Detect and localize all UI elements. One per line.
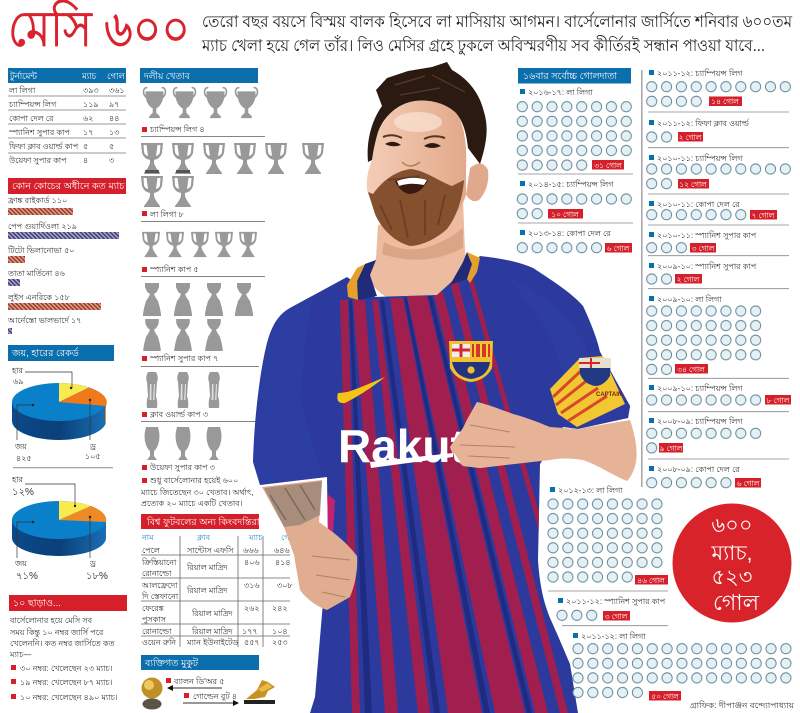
hair: [368, 62, 487, 164]
pie chart: counts: ৪২৫: [16, 454, 32, 463]
panel: team titles: লা লিগা ৮: [149, 210, 185, 219]
panel: other football legends table: বিশ্ব ফুটবলের অন্য কিংবদন্তিরা: [146, 515, 261, 528]
graphic credit: গ্রাফিক: দীপাঞ্জন বন্দ্যোপাধ্যায়: [690, 700, 794, 710]
panel: other football legends table: ওয়েন রুনি: [142, 638, 176, 647]
panel: tournament table: ৪: [83, 156, 88, 165]
panel: besides number 10: খেলেননি। কত নম্বর জার্সিতে কত: [10, 639, 116, 648]
season: 2011-12 champions league: ২০১১-১২: চ্যাম্পিয়ন্স লিগ: [657, 69, 743, 78]
panel: tournament table: ১১৯: [83, 100, 99, 109]
panel: matches under coaches: ফ্রাঙ্ক রাইকার্ড ১১০: [7, 196, 67, 205]
season: 2010-11 spanish super cup: ২০১০-১১: স্প্যানিশ সুপার কাপ: [657, 231, 757, 240]
panel: matches under coaches: [7, 178, 126, 334]
panel: personal awards: ব্যালন ডি'অর ৫: [173, 677, 224, 686]
panel: besides number 10: ১০ ছাড়াও...: [13, 598, 61, 609]
icons: spanish super cup trophies: [143, 283, 253, 351]
panel: tournament table: ৯৭: [109, 100, 119, 109]
panel: matches under coaches: পেপ গুয়ার্দিওলা ২১৯: [8, 222, 77, 231]
season: 2012-13 la liga: ৪৬ গোল: [637, 576, 666, 585]
icons: spanish cup trophies: [142, 232, 257, 257]
season: 2011-12 spanish super cup: ২০১১-১২: স্প্যানিশ সুপার কাপ: [566, 597, 666, 606]
panel: other football legends table: ২৬২: [244, 604, 260, 613]
icons: la liga trophies: [141, 143, 324, 207]
season: 2010-11 copa del rey: ২০১০-১১: কোপা দেল রে: [657, 200, 740, 209]
panel: other football legends table: [141, 514, 299, 647]
season: 2012-13 la liga: ২০১২-১৩: লা লিগা: [558, 486, 623, 495]
text: trophies note: ম্যাচে জিতেছেন ৩০ খেতাব। অর্থাৎ,: [140, 488, 253, 497]
pie chart: counts: ৬৯: [13, 377, 23, 386]
panel: tournament table: ৬২: [83, 114, 93, 123]
panel: other football legends table: ১৭৭: [242, 627, 258, 636]
intro text: [201, 11, 793, 55]
panel: team titles: [140, 68, 324, 508]
season: 2014-15 champions league: ২০১৪-১৫: চ্যাম্পিয়ন্স লিগ: [528, 180, 614, 189]
panel: other football legends table: রিয়াল মাদ্রিদ: [186, 586, 228, 595]
panel: other football legends table: ৩০৮: [277, 581, 293, 590]
season: 2010-11 champions league: [644, 154, 793, 191]
season: 2008-09 champions league: [644, 417, 763, 455]
panel: tournament table: ৫: [83, 142, 88, 151]
season: 2012-13 la liga: [546, 486, 668, 585]
pie chart: counts: হার: [11, 366, 24, 375]
callout: 600 matches 523 goals: ৫২৩: [712, 566, 752, 589]
season: 2011-12 la liga: [571, 632, 793, 701]
panel: personal awards: [141, 655, 275, 710]
season: 2011-12 club world cup: ২০১১-১২: ফিফা ক্লাব ওয়ার্ল্ড: [657, 119, 749, 128]
pie chart: percent: ৭১%: [16, 571, 38, 582]
panel: tournament table: ৩৬১: [109, 86, 125, 95]
panel: besides number 10: সময় কিন্তু ১০ নম্বর জার্সি পরে: [9, 628, 104, 637]
title: মেসি ৬০০: [8, 0, 190, 57]
panel: other football legends table: দি স্তেফানো: [141, 592, 179, 601]
panel: besides number 10: ১৯ নম্বর: খেলেছেন ৮৭ ম্যাচ।: [20, 678, 113, 687]
panel: matches under coaches: টিটো ভিলানোভা ৫০: [7, 245, 75, 255]
panel: besides number 10: ৩০ নম্বর: খেলেছেন ২৩ ম্যাচ।: [20, 664, 113, 673]
pie chart: percent: ১২%: [12, 487, 34, 498]
season: 2010-11 copa del rey: [644, 200, 777, 222]
season: 2011-12 la liga: ২০১১-১২: লা লিগা: [581, 632, 646, 641]
callout: 600 matches 523 goals: ৬০০: [712, 514, 752, 537]
panel: besides number 10: বার্সেলোনার হয়ে মেসি সব: [9, 616, 93, 625]
panel: matches under coaches: কোন কোচের অধীনে কত ম্যাচ: [12, 179, 125, 192]
arrow: ballon d'or: [172, 687, 222, 689]
season: 2008-09 copa del rey: [644, 465, 761, 490]
neck: [367, 200, 467, 300]
panel: matches under coaches: লুইস এনরিকে ১৫৮: [7, 293, 71, 302]
panel: other football legends table: নাম: [141, 533, 154, 542]
ear: [466, 163, 488, 201]
right forearm and hand: [450, 402, 637, 481]
text: trophies note: [140, 476, 253, 508]
season: 2013-14 copa del rey: [515, 229, 632, 255]
panel: tournament table: গোল: [107, 71, 125, 81]
panel: other football legends table: পুসকাস: [142, 615, 167, 624]
season: 2008-09 champions league: ৯ গোল: [660, 444, 684, 453]
panel: other football legends table: ৬৪৬: [274, 546, 290, 555]
season: 2016-17 la liga: ২০১৬-১৭: লা লিগা: [528, 88, 593, 97]
season: 2009-10 champions league: ৮ গোল: [767, 396, 791, 405]
icons: uefa super cup trophies: [144, 427, 222, 460]
panel: tournament table: স্প্যানিশ সুপার কাপ: [8, 128, 70, 137]
panel: other football legends table: ২৫৩: [272, 638, 288, 647]
season: 2010-11 spanish super cup: ৩ গোল: [692, 244, 716, 253]
callout: 600 matches 523 goals: গোল: [713, 590, 760, 615]
season: 2016-17 la liga: ৩১ গোল: [594, 161, 623, 170]
panel: personal awards: ব্যক্তিগত মুকুট: [144, 656, 199, 669]
panel: tournament table: ৩: [109, 156, 114, 165]
panel: other football legends table: রিয়াল মাদ্রিদ: [186, 563, 228, 572]
season: 2008-09 copa del rey: ২০০৮-০৯: কোপা দেল রে: [657, 465, 740, 474]
panel: tournament table: ম্যাচ: [81, 71, 97, 81]
season: 2010-11 spanish super cup: [644, 231, 757, 255]
panel: top scorer seasons: [515, 68, 793, 701]
panel: team titles: চ্যাম্পিয়ন্স লিগ ৪: [149, 125, 205, 134]
panel: win loss record: [8, 345, 114, 582]
icon: golden boot: [244, 680, 275, 704]
panel: other football legends table: ৬৬৬: [243, 546, 259, 555]
panel: team titles: উয়েফা সুপার কাপ ৩: [149, 462, 215, 472]
panel: team titles: স্প্যানিশ কাপ ৫: [149, 265, 199, 274]
sponsor text: Rakut: [338, 420, 466, 472]
arrow: golden boot: [183, 702, 233, 704]
panel: matches under coaches: আর্নেস্তো ভালভার্দে ১৭: [7, 316, 81, 325]
panel: other football legends table: ১০৪: [272, 627, 288, 636]
panel: tournament table: লা লিগা: [8, 86, 36, 95]
panel: other football legends table: রোনাল্ডো: [142, 569, 172, 578]
panel: tournament table: ৫: [109, 142, 114, 151]
panel: besides number 10: ম্যাচ—: [9, 650, 31, 659]
beard: [368, 169, 464, 246]
callout: 600 matches 523 goals: [672, 504, 792, 622]
season: 2014-15 champions league: [515, 180, 634, 221]
panel: tournament table: উয়েফা সুপার কাপ: [8, 155, 67, 165]
panel: other football legends table: ৪০৬: [244, 558, 260, 567]
panel: other football legends table: ক্লাব: [196, 533, 211, 542]
panel: other football legends table: ২৪২: [272, 604, 288, 613]
text: trophies note: শুধু বার্সেলোনার হয়েই ৬০০: [149, 476, 238, 485]
season: 2013-14 copa del rey: ২০১৩-১৪: কোপা দেল রে: [528, 229, 611, 238]
season: 2014-15 champions league: ১০ গোল: [551, 210, 580, 219]
pie chart: percent: ১৮%: [86, 571, 108, 582]
icons: champions league trophies: [144, 88, 257, 118]
season: 2011-12 spanish super cup: [555, 597, 666, 623]
panel: other football legends table: আলফ্রেদো: [141, 581, 178, 590]
panel: tournament table: কোপা দেল রে: [9, 114, 54, 123]
icon: ballon d'or: [142, 678, 162, 710]
pie chart: percent: ড্র: [89, 559, 96, 568]
panel: tournament table: ফিফা ক্লাব ওয়ার্ল্ড কাপ: [8, 142, 79, 151]
season: 2008-09 copa del rey: ৬ গোল: [737, 479, 761, 488]
season: 2010-11 champions league: ১২ গোল: [679, 180, 708, 189]
season: 2011-12 champions league: [644, 69, 793, 109]
captain armband: [550, 352, 630, 429]
pie chart: percent: [11, 475, 108, 582]
season: 2010-11 champions league: ২০১০-১১: চ্যাম্পিয়ন্স লিগ: [657, 154, 743, 163]
pie chart: percent: জয়: [14, 559, 27, 568]
photo: footballer in striped jersey: [250, 62, 640, 713]
captain armband: CAPTAIN: [596, 392, 622, 398]
panel: tournament table: টুর্নামেন্ট: [9, 70, 38, 82]
season: 2009-10 champions league: ২০০৯-১০: চ্যাম্পিয়ন্স লিগ: [657, 384, 743, 393]
season: 2011-12 club world cup: ২ গোল: [679, 133, 703, 142]
nike swoosh: [337, 377, 385, 403]
season: 2011-12 champions league: ১৪ গোল: [711, 97, 740, 106]
season: 2009-10 champions league: [644, 384, 791, 407]
season: 2009-10 la liga: ২০০৯-১০: লা লিগা: [657, 295, 722, 304]
panel: other football legends table: ম্যান ইউনাইটেড: [186, 637, 238, 647]
panel: other football legends table: ফেরেঙ্ক: [142, 604, 165, 613]
mouth: [395, 177, 428, 194]
panel: matches under coaches: তাতা মার্তিনো ৪৬: [7, 269, 65, 278]
season: 2009-10 spanish super cup: [644, 262, 757, 286]
panel: top scorer seasons: ১৬বার সর্বোচ্চ গোলদাতা: [523, 70, 618, 82]
panel: other football legends table: ৪১৪: [275, 558, 291, 567]
panel: tournament table: ৪৪: [109, 114, 119, 123]
panel: tournament table: চ্যাম্পিয়ন্স লিগ: [8, 100, 57, 109]
icons: club world cup trophies: [146, 372, 220, 408]
season: 2011-12 club world cup: [644, 119, 749, 144]
panel: tournament table: ১৩: [109, 128, 119, 137]
season: 2009-10 la liga: [644, 295, 763, 377]
pie chart: counts: জয়: [14, 442, 27, 451]
pie chart: percent: হার: [11, 475, 24, 484]
panel: tournament table: [8, 68, 126, 165]
club crest: [449, 341, 493, 382]
panel: other football legends table: ম্যাচ: [248, 533, 263, 542]
pie chart: counts: ১০৫: [85, 452, 101, 461]
panel: other football legends table: রিয়াল মাদ্রিদ: [191, 627, 233, 636]
panel: other football legends table: রোনাল্ডো: [142, 627, 172, 636]
panel: besides number 10: ১০ নম্বর: খেলেছেন ৪৯০ ম্যাচ।: [20, 693, 118, 702]
left forearm and hand: [262, 480, 357, 610]
panel: team titles: ক্লাব ওয়ার্ল্ড কাপ ৩: [149, 410, 208, 419]
season: 2009-10 la liga: ৩৪ গোল: [677, 365, 706, 374]
panel: other football legends table: পেলে: [142, 546, 161, 555]
pie chart: counts: [11, 366, 107, 463]
panel: personal awards: গোল্ডেন বুট ৪: [193, 691, 237, 701]
collar: [357, 252, 472, 300]
panel: other football legends table: ক্রিস্তিয়ানো: [141, 558, 177, 567]
panel: other football legends table: গোল: [281, 533, 299, 542]
season: 2016-17 la liga: [515, 88, 634, 172]
jersey: [250, 250, 640, 713]
panel: tournament table: ৩৯৩: [83, 86, 99, 95]
season: 2008-09 champions league: ২০০৮-০৯: চ্যাম্পিয়ন্স লিগ: [657, 417, 743, 426]
panel: team titles: স্প্যানিশ সুপার কাপ ৭: [149, 354, 218, 363]
eyes: [385, 142, 441, 148]
panel: other football legends table: ৫৫৭: [244, 638, 260, 647]
panel: other football legends table: ৩১৬: [244, 581, 260, 590]
panel: other football legends table: রিয়াল মাদ্রিদ: [191, 609, 233, 618]
season: 2009-10 spanish super cup: ২০০৯-১০: স্প্যানিশ সুপার কাপ: [657, 262, 757, 271]
season: 2011-12 spanish super cup: ৩ গোল: [605, 612, 629, 621]
text: trophies note: প্রত্যেক ২০ ম্যাচে একটি খেতাব।: [141, 498, 243, 508]
callout: 600 matches 523 goals: ম্যাচ,: [710, 542, 753, 565]
panel: tournament table: ১৭: [83, 128, 93, 137]
head: [367, 100, 466, 245]
panel: other football legends table: সান্টোস এফসি: [186, 546, 234, 555]
season: 2009-10 spanish super cup: ২ গোল: [677, 275, 701, 284]
pie chart: counts: ড্র: [89, 442, 96, 451]
panel: besides number 10: [9, 595, 127, 702]
panel: team titles: দলীয় খেতাব: [143, 70, 191, 81]
season: 2011-12 la liga: ৫০ গোল: [651, 692, 680, 701]
season: 2010-11 copa del rey: ৭ গোল: [752, 211, 776, 220]
season: 2013-14 copa del rey: ৬ গোল: [607, 244, 631, 253]
panel: win loss record: জয়, হারের রেকর্ড: [11, 347, 80, 359]
